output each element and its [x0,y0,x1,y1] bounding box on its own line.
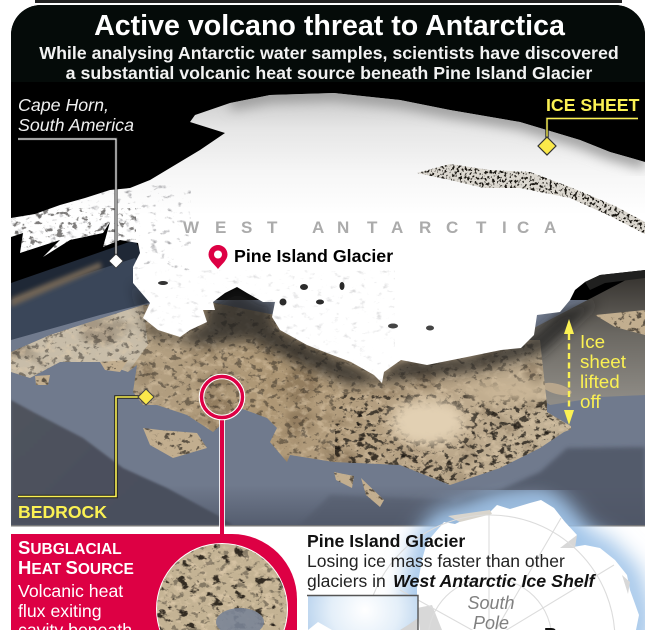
region label: West Antarctica: WESTANTARCTICA [183,218,556,237]
blue glow around continent [417,500,639,630]
arrow: ice sheet lifted off [564,319,574,425]
continent [417,500,639,630]
nunataks [300,284,308,290]
gray rule under map [11,525,645,526]
label: ice sheet lifted off: Ice [580,331,605,352]
inset description: Losing ice mass faster than other [307,551,565,571]
callout: ice sheet [538,95,640,155]
panel: 3D map of West Antarctica [11,5,645,525]
heading: subglacial heat source: UBGLACIAL [30,541,122,558]
ice sheet [11,90,645,390]
inset heading: Pine Island Glacier: Pine Island Glacier [307,531,465,551]
label: ice sheet lifted off: off [580,391,601,412]
callout: bedrock [18,389,154,522]
title: Active volcano threat to Antarctica [94,10,566,42]
label: ice sheet lifted off: sheet [580,351,627,372]
shadow below ice front [133,283,600,385]
subtitle: a substantial volcanic heat source beneath Pine Island Glacier [66,63,592,83]
heading: subglacial heat source: H [18,557,31,578]
label: South Pole: South [467,593,515,613]
top dark strip [35,0,622,3]
label: ice sheet lifted off: lifted [580,371,620,392]
inset emphasis: West Antarctic Ice Shelf: West Antarctic Ice Shelf [393,571,597,591]
magnified rock circle [156,543,288,630]
bedrock land [11,295,571,490]
graticule [365,515,615,630]
Antarctic glow over map bottom [430,486,583,525]
callout: Cape Horn [18,95,134,268]
panel: subglacial heat source [11,416,297,630]
inset description: glaciers in [307,571,386,591]
small rock islands [11,310,645,510]
ice shelf grey patches [417,535,630,630]
subtitle: While analysing Antarctic water samples, scientists have discovered [39,43,619,63]
icon: location pin [208,245,228,269]
description text: Volcanic heat [18,581,123,601]
label: Pine Island Glacier: Pine Island Glacier [234,246,393,266]
connector line [219,416,225,534]
heading: subglacial heat source: EAT SOURCE [31,557,134,578]
callout: ice sheet: ICE SHEET [546,95,640,115]
callout: Cape Horn: Cape Horn, [18,95,109,115]
description text: flux exiting [18,601,102,621]
callout: bedrock: BEDROCK [18,502,107,522]
inset box [307,596,418,630]
dark bay rim at right [585,270,645,290]
locator circle on map [202,376,242,418]
rugged mountain band [418,164,645,234]
callout: Cape Horn: South America [18,115,134,135]
inset: Antarctica locator map [373,490,645,630]
heading: subglacial heat source: S [18,537,30,558]
